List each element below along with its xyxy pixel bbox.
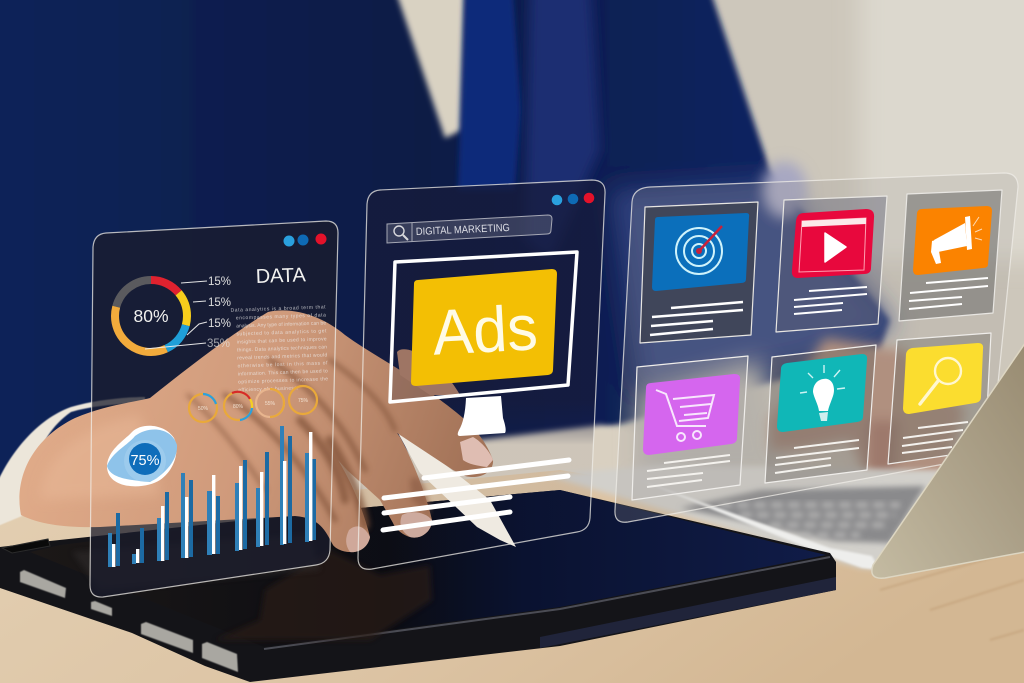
data paragraph: efficiency of a business. [238, 385, 298, 393]
card: magnifier [888, 333, 991, 464]
monitor frame [390, 252, 577, 402]
data paragraph: reveal trends and metrics that would [237, 352, 328, 361]
monitor stand [458, 396, 506, 436]
small gauges [189, 386, 317, 422]
data paragraph: information. This can then be used to [238, 368, 328, 377]
75% blob badge: 75% [130, 453, 160, 469]
search bar: DIGITAL MARKETING [416, 222, 510, 238]
donut percentage labels [145, 276, 231, 350]
data paragraph [230, 304, 329, 394]
donut percentage labels: 35% [207, 338, 230, 350]
middle panel glass [358, 180, 605, 569]
wooden desk [0, 470, 1024, 683]
Ads yellow card [411, 269, 557, 386]
donut percentage labels: 15% [208, 276, 231, 288]
icon: play [825, 233, 846, 262]
data paragraph: things. Data analytics techniques can [237, 344, 327, 353]
nail middle [400, 512, 432, 538]
small gauges: 75% [298, 398, 309, 404]
hand holding stylus [19, 310, 493, 552]
data paragraph: optimize processes to increase the [238, 376, 328, 385]
thumb [397, 349, 460, 395]
card: cart [632, 356, 748, 500]
middle panel window dots [552, 193, 594, 205]
data paragraph: encompasses many types of data [236, 312, 326, 322]
left panel glass [90, 221, 338, 597]
donut percentage labels: 15% [208, 318, 231, 330]
shirt cuff [0, 397, 145, 526]
data paragraph: Data analytics is a broad term that [230, 304, 326, 314]
data paragraph: otherwise be lost in this mass of [237, 360, 328, 369]
bar chart [108, 426, 316, 567]
business suit [0, 0, 895, 515]
stylus [398, 433, 516, 547]
jacket lapel [525, 0, 600, 260]
icon: magnifier [394, 226, 408, 240]
icon: lightbulb [800, 365, 845, 421]
DATA heading: DATA [255, 264, 307, 288]
donut chart 80% [115, 280, 187, 352]
icon: magnifier [920, 358, 961, 404]
left panel window dots [284, 234, 326, 246]
right panel glass [615, 173, 1018, 522]
data paragraph: analysis. Any type of information can be [236, 320, 326, 330]
data paragraph: insights that can be used to improve [237, 336, 327, 346]
icon: cart [656, 390, 714, 441]
tablet case edge [540, 577, 836, 648]
donut percentage labels: 15% [208, 297, 231, 309]
card: video [776, 196, 887, 332]
data paragraph: subjected to data analytics to get [236, 328, 327, 338]
forearm highlight [40, 415, 160, 500]
Ads yellow card: Ads [431, 291, 539, 369]
middle panel text lines [383, 460, 569, 530]
75% blob badge [107, 426, 177, 486]
blurred typing hand [770, 338, 965, 485]
card: megaphone [899, 190, 1002, 321]
necktie [458, 0, 521, 190]
laptop keyboard base [545, 465, 950, 570]
nail ring [346, 526, 370, 552]
far desk [330, 425, 1024, 560]
shirt collar [392, 0, 466, 138]
tablet screen [30, 490, 826, 647]
finger shadows [188, 360, 395, 525]
tablet bezel highlight [264, 557, 830, 649]
small gauges: 50% [198, 406, 209, 412]
small gauges: 55% [265, 401, 276, 407]
hand reflection in screen [215, 550, 432, 640]
search bar [387, 215, 552, 243]
stylus strap [2, 539, 50, 553]
panel outlines [90, 173, 1018, 597]
card: target [640, 202, 758, 343]
tablet [0, 490, 836, 682]
nail index [460, 437, 493, 467]
tablet side buttons [20, 570, 238, 672]
blurred shirt and laptop glare behind right panel [640, 360, 790, 480]
icon: target [676, 226, 722, 274]
knuckle shade [410, 477, 430, 515]
icon: megaphone [931, 216, 972, 264]
donut chart 80%: 80% [133, 306, 169, 326]
laptop lid [872, 336, 1024, 578]
card: lightbulb [765, 345, 876, 483]
small gauges: 80% [233, 404, 244, 410]
